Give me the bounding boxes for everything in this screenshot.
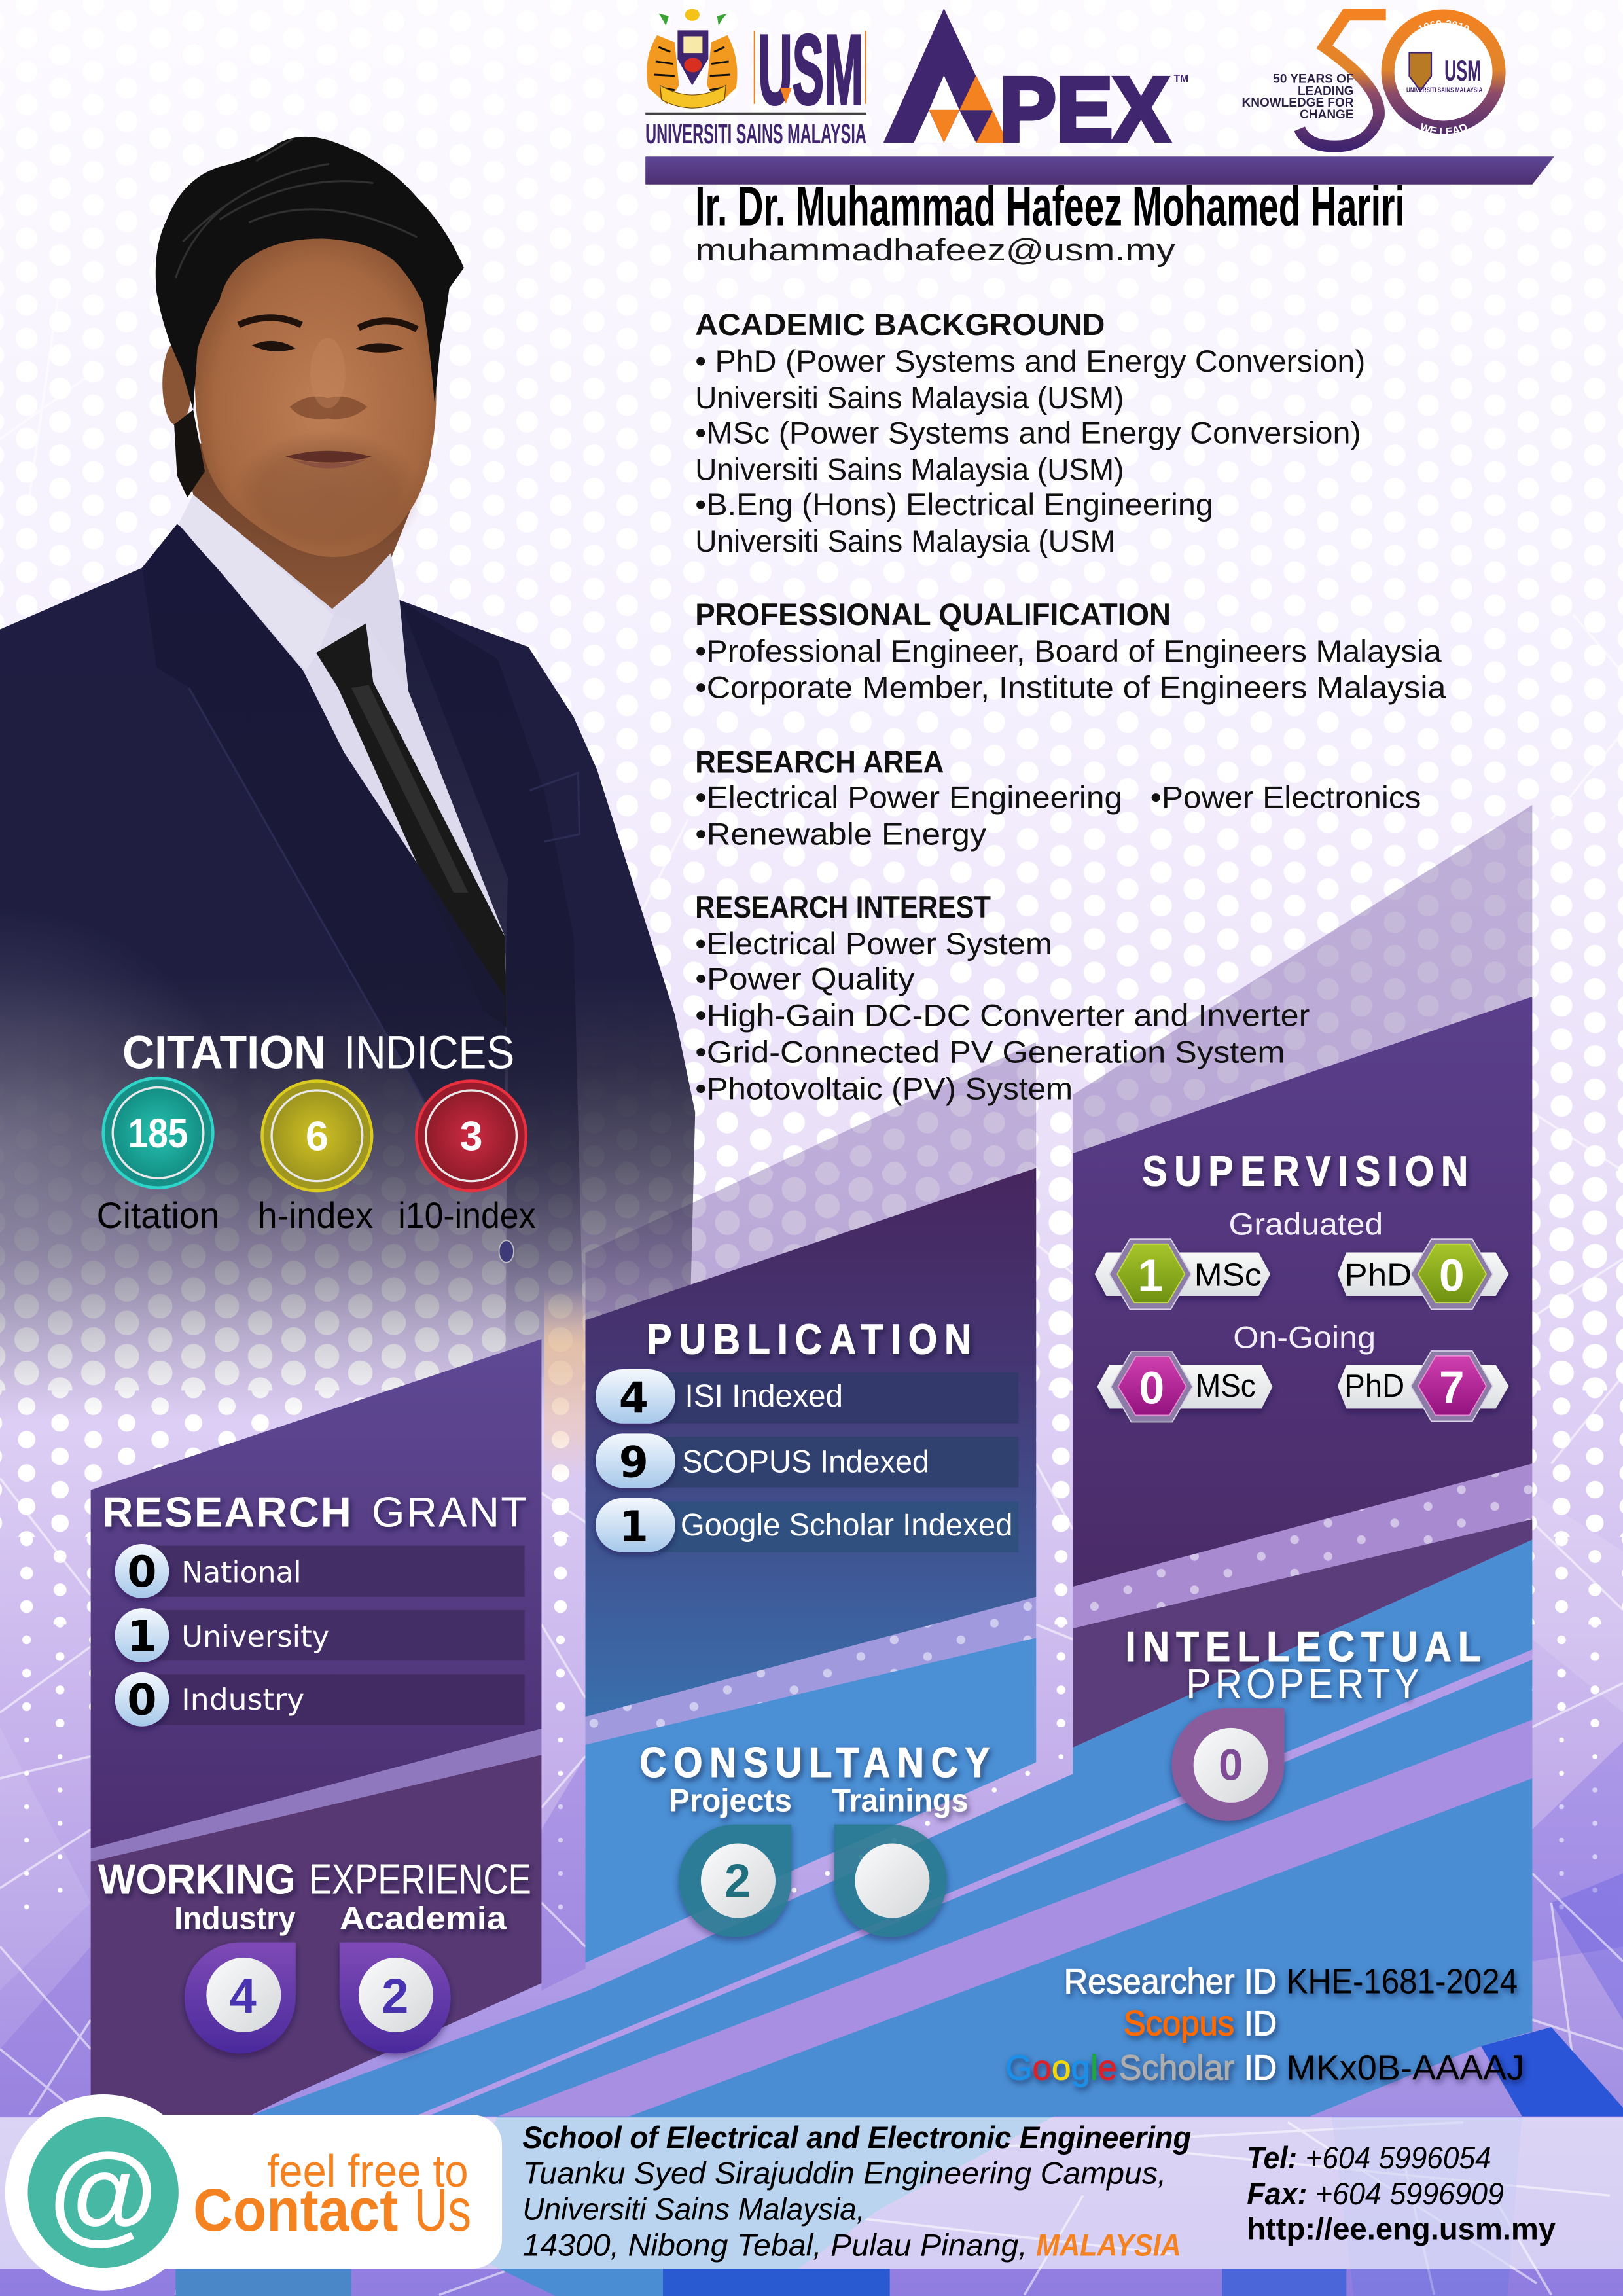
researcher identifiers: Scholar	[1119, 2049, 1234, 2088]
heading: citation indices: CITATION	[122, 1026, 326, 1079]
text: small university name: UNIVERSITI SAINS MALAYSIA	[1406, 86, 1482, 94]
heading: working experience: EXPERIENCE	[309, 1856, 531, 1903]
badge: h-index	[262, 1081, 372, 1191]
heading: working experience: WORKING	[98, 1856, 296, 1903]
text block: professional qualification: PROFESSIONAL QUALIFICATION	[695, 597, 1171, 632]
text: 50 years tagline: LEADING	[1298, 84, 1354, 98]
left sleeve shading	[0, 907, 249, 1405]
text block: research interest: RESEARCH INTEREST	[695, 889, 991, 924]
panel: intellectual property	[1073, 1519, 1532, 1821]
label: graduated: Graduated	[1229, 1206, 1383, 1241]
email: muhammadhafeez@usm.my	[695, 232, 1175, 267]
publication row: isi: 4	[619, 1374, 649, 1423]
suit jacket	[0, 524, 695, 1420]
text block: address: School of Electrical and Electronic Engineering	[522, 2120, 1191, 2155]
text block: address: Tuanku Syed Sirajuddin Engineering Campus,	[522, 2155, 1166, 2190]
badge: on-going phd: PhD	[1344, 1368, 1404, 1404]
badge: industry years	[185, 1942, 296, 2053]
text block: research interest: •Power Quality	[695, 961, 915, 996]
heading: research grant	[103, 1488, 527, 1535]
text block: research interest: •Electrical Power System	[695, 926, 1052, 961]
text: usm wordmark	[755, 14, 866, 126]
text block: research interest: •Photovoltaic (PV) System	[695, 1071, 1073, 1105]
grant row: industry	[115, 1672, 525, 1727]
badge: citation count: 185	[128, 1111, 188, 1157]
text: 50 years tagline: 50 YEARS OF	[1273, 73, 1354, 86]
text: feel free to contact us: Us	[414, 2177, 471, 2244]
text: 50 years tagline: CHANGE	[1300, 108, 1354, 122]
text: feel free to contact us: feel free to	[267, 2145, 469, 2197]
text block: phone and web	[1247, 2140, 1556, 2246]
grant row: national: National	[181, 1554, 302, 1589]
heading: research grant: GRANT	[372, 1488, 527, 1535]
text block: academic background: Universiti Sains Malaysia (USM	[695, 524, 1115, 558]
badge: graduated phd	[1338, 1239, 1509, 1309]
stubble shadow	[231, 430, 425, 559]
badge: projects	[679, 1825, 791, 1937]
publication row: google scholar	[596, 1498, 1018, 1552]
text: ring motto: WE LEAD	[1421, 123, 1467, 134]
text block: academic background: •MSc (Power Systems and Energy Conversion)	[695, 416, 1361, 450]
grant row: industry: 0	[127, 1676, 156, 1725]
lapels	[142, 524, 505, 1127]
heading: citation indices: INDICES	[344, 1026, 514, 1079]
labels: citation metrics: i10-index	[398, 1194, 536, 1236]
badge: i10-index	[416, 1081, 526, 1191]
heading: intellectual property: PROPERTY	[1186, 1660, 1419, 1708]
badge: trainings	[834, 1825, 947, 1937]
labels: citation metrics	[97, 1194, 536, 1236]
text: small usm wordmark: USM	[1444, 55, 1481, 87]
badge: graduated phd: PhD	[1344, 1257, 1412, 1293]
publication row: isi: ISI Indexed	[685, 1378, 843, 1414]
heading: consultancy: CONSULTANCY	[639, 1738, 990, 1786]
publication row: scopus	[596, 1433, 1018, 1488]
hair	[156, 137, 464, 410]
grant row: industry: Industry	[181, 1682, 304, 1717]
logo: apex: PEX	[999, 59, 1169, 160]
grant row: national: 0	[127, 1548, 156, 1597]
text: feel free to contact us: Contact	[193, 2177, 398, 2244]
text block: research interest: •High-Gain DC-DC Converter and Inverter	[695, 998, 1310, 1033]
icon: at sign	[5, 2094, 201, 2291]
neck	[183, 439, 416, 609]
heading: intellectual property	[1126, 1623, 1481, 1708]
text: USM	[758, 14, 863, 126]
researcher identifiers: ID	[1244, 2049, 1277, 2088]
researcher identifiers: ID	[1244, 2004, 1277, 2043]
face	[195, 227, 437, 557]
contact bar	[0, 2117, 1623, 2269]
badge: on-going msc: 0	[1139, 1363, 1164, 1414]
badge: intellectual property count	[1171, 1708, 1285, 1821]
text block: academic background: Universiti Sains Malaysia (USM)	[695, 380, 1124, 415]
icon: number five	[1300, 14, 1386, 147]
text block: phone and web: Tel: +604 5996054	[1247, 2140, 1491, 2175]
grant row: university: 1	[127, 1612, 156, 1661]
badge: on-going phd	[1338, 1351, 1509, 1421]
panel: supervision	[1073, 997, 1532, 1587]
publication row: scopus: 9	[619, 1438, 649, 1487]
researcher identifiers: Google	[1005, 2049, 1117, 2088]
translucent diagonal bands	[91, 805, 1532, 1861]
badge: projects: 2	[724, 1855, 751, 1907]
panel: working experience	[91, 1755, 541, 2117]
logo: apex: TM	[1173, 73, 1188, 84]
text block: research area: •Renewable Energy	[695, 816, 987, 851]
text block: address	[522, 2120, 1191, 2263]
text: 50 years tagline	[1242, 73, 1354, 122]
logo: universiti sains malaysia	[645, 9, 866, 150]
panel: consultancy	[586, 1638, 1036, 1963]
publication row: isi	[596, 1369, 1018, 1424]
publication row: scopus: SCOPUS Indexed	[682, 1444, 929, 1480]
badge: industry years: 4	[230, 1969, 257, 2023]
heading: working experience: Industry	[174, 1900, 296, 1936]
researcher identifiers: MKx0B-AAAAJ	[1287, 2049, 1524, 2088]
text: ring years: 1969-2019	[1418, 20, 1469, 30]
blue diagonal shape	[175, 1540, 1623, 2296]
icon: crest	[647, 9, 738, 108]
shirt	[179, 495, 508, 997]
badge: on-going phd: 7	[1439, 1361, 1465, 1412]
text block: address: 14300, Nibong Tebal, Pulau Pinang,	[522, 2228, 1027, 2263]
logo: universiti sains malaysia: UNIVERSITI SAINS MALAYSIA	[645, 119, 866, 150]
text block: professional qualification	[695, 597, 1446, 705]
icon: at sign: @	[49, 2130, 158, 2255]
tie	[316, 624, 507, 1028]
panel: citation indices	[97, 1026, 536, 1236]
badge: graduated msc: 1	[1137, 1249, 1163, 1300]
text block: academic background: •B.Eng (Hons) Electrical Engineering	[695, 487, 1213, 522]
grant row: national	[115, 1544, 525, 1598]
heading: consultancy: Trainings	[832, 1783, 969, 1819]
white pill	[88, 2115, 502, 2269]
heading: working experience	[98, 1856, 531, 1936]
researcher identifiers: Scopus	[1124, 2004, 1234, 2043]
heading: citation indices	[122, 1026, 514, 1079]
text block: research interest: •Grid-Connected PV Generation System	[695, 1035, 1285, 1069]
icon: small crest	[1410, 53, 1431, 91]
badge: graduated phd: 0	[1439, 1249, 1465, 1300]
heading: research grant: RESEARCH	[103, 1488, 351, 1535]
logo: 50 years	[1216, 9, 1525, 157]
heading: intellectual property: INTELLECTUAL	[1126, 1623, 1481, 1670]
panel: publication	[586, 1168, 1036, 1717]
heading: working experience: Academia	[340, 1900, 507, 1936]
badge: on-going msc	[1097, 1352, 1272, 1422]
grant row: university: University	[181, 1619, 329, 1654]
text block: academic background	[695, 307, 1365, 558]
text block: academic background: • PhD (Power Systems and Energy Conversion)	[695, 344, 1365, 378]
peach hand glimpse	[544, 1288, 586, 1479]
researcher identifiers: KHE-1681-2024	[1287, 1962, 1518, 2001]
labels: citation metrics: h-index	[258, 1194, 373, 1236]
nose and mouth	[290, 397, 367, 419]
heading: consultancy	[639, 1738, 990, 1819]
text block: research area: •Electrical Power Engineering	[695, 780, 1122, 814]
eyebrows and eyes	[239, 317, 417, 329]
badge: citation count	[103, 1078, 213, 1188]
badge: on-going msc: MSc	[1196, 1368, 1256, 1404]
researcher identifiers: Researcher ID	[1064, 1962, 1277, 2001]
heading: supervision: SUPERVISION	[1142, 1147, 1468, 1194]
contact badge	[5, 2094, 502, 2291]
background facets	[0, 1493, 1623, 2117]
text block: research area	[695, 745, 1421, 851]
icon: anniversary ring	[1388, 16, 1499, 128]
heading: publication: PUBLICATION	[647, 1316, 971, 1363]
badge: intellectual property count: 0	[1219, 1740, 1243, 1789]
text block: research area: RESEARCH AREA	[695, 745, 944, 780]
badge: i10-index: 3	[460, 1114, 482, 1160]
text block: address: MALAYSIA	[1036, 2228, 1181, 2263]
publication row: google scholar: Google Scholar Indexed	[681, 1507, 1012, 1543]
text block: academic background: Universiti Sains Malaysia (USM)	[695, 452, 1124, 486]
panel: research grant	[91, 1339, 541, 1848]
publication row: google scholar: 1	[619, 1503, 649, 1552]
text block: phone and web: Fax: +604 5996909	[1247, 2176, 1504, 2211]
logo: apex	[883, 9, 1188, 160]
header bar	[645, 156, 1554, 185]
shirt collars	[179, 495, 334, 670]
badge: h-index: 6	[306, 1114, 329, 1160]
researcher identifiers	[1005, 1962, 1524, 2088]
badge: academia years: 2	[382, 1969, 408, 2023]
text block: phone and web: http://ee.eng.usm.my	[1247, 2211, 1556, 2246]
label: on-going: On-Going	[1233, 1320, 1376, 1355]
text block: address: Universiti Sains Malaysia,	[522, 2192, 865, 2227]
badge: graduated msc: MSc	[1194, 1257, 1262, 1293]
text block: professional qualification: •Corporate Member, Institute of Engineers Malaysia	[695, 670, 1446, 705]
labels: citation metrics: Citation	[97, 1194, 219, 1236]
badge: graduated msc	[1095, 1239, 1270, 1309]
portrait photo illustration	[0, 137, 695, 1420]
text block: research area: •Power Electronics	[1150, 780, 1421, 814]
text block: academic background: ACADEMIC BACKGROUND	[695, 307, 1105, 342]
text block: research interest	[695, 889, 1310, 1105]
text: 50 years tagline: KNOWLEDGE FOR	[1242, 96, 1354, 110]
text: feel free to contact us	[193, 2145, 471, 2244]
text block: professional qualification: •Professional Engineer, Board of Engineers Malaysia	[695, 634, 1442, 668]
ear	[162, 341, 192, 426]
badge: academia years	[340, 1942, 451, 2053]
grant row: university	[115, 1608, 525, 1662]
lapel pin	[499, 1240, 514, 1263]
heading: consultancy: Projects	[669, 1783, 792, 1819]
